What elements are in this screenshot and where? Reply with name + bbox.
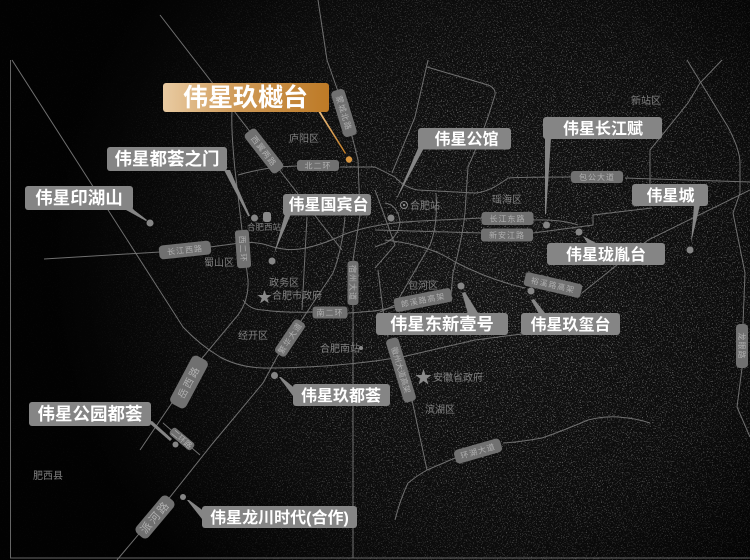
road label: 环湖大道: 环湖大道 bbox=[459, 441, 497, 461]
district: 蜀山区: 蜀山区 bbox=[204, 257, 234, 269]
road label: 宿州大道: 宿州大道 bbox=[348, 265, 358, 301]
road label: 徽州大道高架: 徽州大道高架 bbox=[389, 346, 413, 394]
project callout: 伟星玖玺台: 伟星玖玺台 bbox=[530, 315, 611, 334]
road label: 北二环 bbox=[297, 160, 339, 171]
project callout: 伟星公园都荟 bbox=[29, 402, 178, 448]
road label: 北二环: 北二环 bbox=[304, 162, 332, 170]
project callout: 伟星印湖山 bbox=[25, 186, 154, 226]
district: 经开区: 经开区 bbox=[238, 329, 268, 342]
project callout: 伟星都荟之门: 伟星都荟之门 bbox=[114, 149, 220, 169]
road label: 西二环: 西二环 bbox=[237, 235, 248, 263]
road label: 长江西路 bbox=[158, 240, 212, 260]
place: 安徽省政府 bbox=[416, 369, 483, 384]
road label: 长江西路: 长江西路 bbox=[167, 243, 203, 257]
place: 合肥市政府: 合肥市政府 bbox=[272, 289, 322, 302]
project callout: 伟星龙川时代(合作): 伟星龙川时代(合作) bbox=[210, 508, 349, 527]
road label: 新安江路: 新安江路 bbox=[489, 230, 525, 240]
road label: 徽州大道高架 bbox=[385, 337, 417, 403]
district: 滨湖区: 滨湖区 bbox=[425, 403, 455, 416]
road label: 裕溪路高架 bbox=[523, 272, 583, 298]
place: 合肥南站: 合肥南站 bbox=[320, 342, 360, 355]
place: 合肥市政府 bbox=[258, 289, 322, 303]
place: 合肥站: 合肥站 bbox=[410, 199, 440, 212]
road label: 西二环 bbox=[235, 230, 251, 268]
project callout: 伟星玖都荟: 伟星玖都荟 bbox=[301, 386, 381, 405]
district: 肥西县: 肥西县 bbox=[33, 470, 63, 482]
district: 政务区: 政务区 bbox=[269, 276, 299, 289]
project callout: 伟星公馆: 伟星公馆 bbox=[434, 130, 499, 148]
project callout: 伟星公园都荟: 伟星公园都荟 bbox=[38, 404, 143, 424]
project callout: 伟星东新壹号: 伟星东新壹号 bbox=[390, 314, 494, 334]
road label: 裕溪路高架: 裕溪路高架 bbox=[530, 275, 576, 295]
district: 新站区: 新站区 bbox=[631, 94, 661, 107]
road label: 包公大道: 包公大道 bbox=[579, 172, 615, 182]
road label: 郎溪路高架 bbox=[393, 288, 453, 312]
road label: 岳西路 bbox=[168, 354, 210, 410]
highlighted callout: 伟星玖樾台 bbox=[163, 83, 352, 163]
project callout: 伟星城: 伟星城 bbox=[646, 186, 695, 205]
project callout: 伟星公馆 bbox=[388, 128, 511, 222]
road label: 西翼两路: 西翼两路 bbox=[249, 134, 279, 168]
project callout: 伟星珑胤台: 伟星珑胤台 bbox=[566, 245, 646, 264]
road label: 环湖大道 bbox=[453, 438, 503, 464]
road label: 包公大道 bbox=[571, 171, 623, 183]
project callout: 伟星长江赋 bbox=[543, 117, 662, 228]
road label: 西翼两路 bbox=[243, 127, 285, 175]
road label: 郎溪路高架: 郎溪路高架 bbox=[400, 291, 446, 309]
project callout: 伟星东新壹号 bbox=[376, 282, 508, 335]
project callout: 伟星国宾台: 伟星国宾台 bbox=[288, 195, 369, 214]
place: 合肥站 bbox=[400, 199, 440, 212]
district: 庐阳区: 庐阳区 bbox=[289, 132, 319, 145]
road label: 繁华大道: 繁华大道 bbox=[276, 320, 304, 356]
project callout: 伟星长江赋: 伟星长江赋 bbox=[563, 120, 643, 138]
road labels bbox=[133, 88, 748, 541]
road label: 二环路: 二环路 bbox=[170, 427, 194, 451]
road label: 岳西路: 岳西路 bbox=[175, 363, 203, 401]
road label: 长江东路 bbox=[482, 212, 534, 225]
road label: 派河路 bbox=[133, 493, 177, 541]
road label: 宿州大道 bbox=[348, 261, 358, 305]
road label: 长江东路: 长江东路 bbox=[490, 214, 526, 224]
place: 安徽省政府: 安徽省政府 bbox=[433, 371, 483, 384]
project callout: 伟星都荟之门 bbox=[107, 147, 258, 222]
project callout: 伟星玖都荟 bbox=[271, 372, 390, 406]
road label: 蒙城北路: 蒙城北路 bbox=[334, 94, 354, 132]
road label: 龙眼路 bbox=[736, 324, 748, 368]
district: 瑶海区: 瑶海区 bbox=[492, 193, 522, 206]
project callout: 伟星城 bbox=[632, 184, 708, 254]
project callout: 伟星珑胤台 bbox=[547, 228, 665, 265]
road label: 派河路: 派河路 bbox=[138, 498, 173, 536]
highlighted callout: 伟星玖樾台: 伟星玖樾台 bbox=[183, 83, 308, 112]
road label: 蒙城北路 bbox=[330, 88, 358, 138]
project callout: 伟星国宾台 bbox=[268, 194, 371, 264]
road label: 新安江路 bbox=[481, 228, 533, 242]
project callout: 伟星印湖山: 伟星印湖山 bbox=[35, 188, 123, 208]
project callout: 伟星玖玺台 bbox=[521, 288, 620, 335]
place: 合肥西站 bbox=[247, 212, 282, 232]
road label: 龙眼路: 龙眼路 bbox=[737, 332, 747, 360]
road label: 南二环 bbox=[312, 306, 348, 318]
road label: 南二环: 南二环 bbox=[316, 308, 344, 318]
place: 合肥西站: 合肥西站 bbox=[247, 222, 282, 232]
district labels bbox=[33, 94, 661, 482]
project callout: 伟星龙川时代(合作) bbox=[180, 494, 357, 528]
district: 包河区: 包河区 bbox=[408, 279, 438, 292]
